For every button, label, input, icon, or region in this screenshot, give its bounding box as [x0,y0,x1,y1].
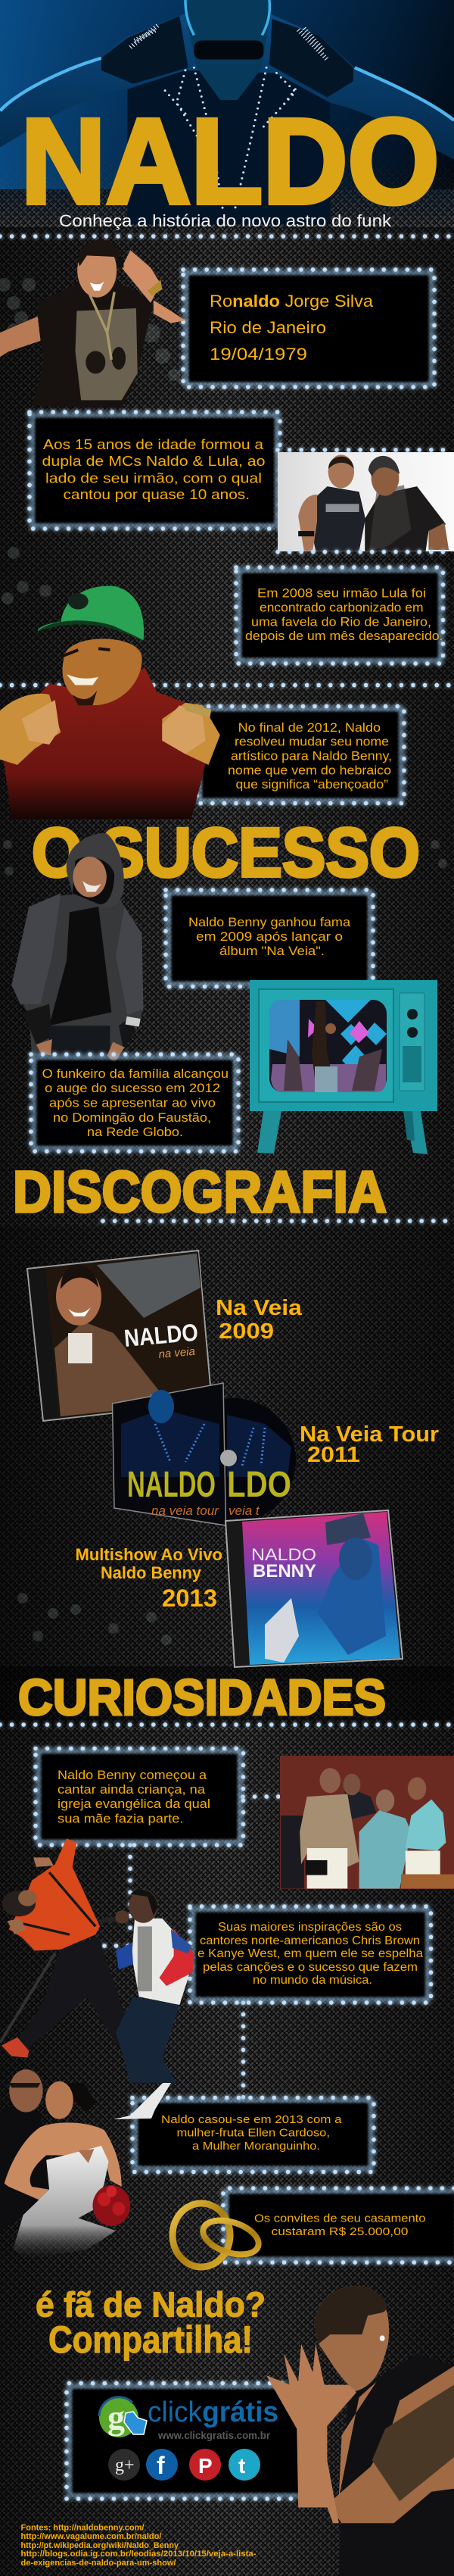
icon: Google Plus: g+ [115,2456,135,2475]
icon: Twitter: t [238,2454,245,2478]
header photo: blue-lit singer [0,0,454,235]
text block: Naldo Benny ganhou fama [188,916,351,929]
photo: wedding couple [0,2069,130,2259]
logo wordmark: clickgrátis [148,2396,278,2428]
panel: marriage [132,2098,374,2172]
sources [21,2523,257,2568]
panel: inspirations [190,1906,431,2003]
text block: e Kanye West, em quem ele se espelha [197,1947,423,1960]
photo: Naldo praying pose [266,2286,454,2576]
sources: http://www.vagalume.com.br/naldo/ [21,2532,162,2541]
panel: identity [183,270,434,387]
text block [42,1067,229,1139]
text block: No final de 2012, Naldo [238,721,381,735]
icon: gold wedding rings [173,2203,263,2267]
text block: a Mulher Moranguinho. [192,2140,320,2153]
text block: sua mãe fazia parte. [58,1812,184,1825]
icon: retro teal television [250,980,437,1154]
text block: mulher-fruta Ellen Cardoso, [177,2127,330,2140]
cover text: BENNY [253,1561,316,1582]
sources: http://blogs.odia.ig.com.br/leodias/2013/10/15/veja-a-lista- [21,2549,257,2559]
text block: encontrado carbonizado em [260,601,424,615]
panel: name change [197,706,404,803]
label: Na Veia 2009: 2009 [219,1319,274,1344]
heading: O SUCESSO: O SUCESSO [32,814,420,891]
photo: Naldo in green cap and red jacket [0,586,220,819]
text block: no Domingão do Faustão, [53,1111,211,1125]
disc cover title: NALDO [127,1465,216,1505]
identity text: 19/04/1979 [210,345,307,364]
photo: Naldo with family at church [280,1756,454,1889]
text block: cantar ainda criança, na [58,1783,206,1797]
text block: cantou por quase 10 anos. [64,486,250,502]
logo URL: www.clickgratis.com.br [157,2430,271,2441]
text block [188,916,351,958]
text block [58,1769,210,1825]
subtitle: Conheça a história do novo astro do funk [59,211,392,230]
disc subtitle: veia t [229,1503,260,1518]
text block: resolveu mudar seu nome [235,735,389,749]
text block: cantores norte-americanos Chris Brown [200,1934,420,1947]
text block: em 2009 após lançar o [196,930,343,944]
icon: Pinterest [189,2449,221,2481]
panel: invitations [223,2188,454,2262]
text block: álbum "Na Veia". [219,945,325,958]
label: Na Veia 2009 [216,1296,303,1344]
text block: o auge do sucesso em 2012 [45,1082,220,1095]
logo letter: g [107,2398,125,2437]
panel: fame in 2009 [166,890,373,986]
panel: church childhood [36,1748,244,1845]
text block: Naldo Benny começou a [58,1769,207,1782]
text block: pelas canções e o sucesso que fazem [203,1961,418,1974]
sources: Fontes: http://naldobenny.com/ [21,2523,145,2532]
text block: Aos 15 anos de idade formou a [43,436,264,452]
sources: http://pt.wikipedia.org/wiki/Naldo_Benny [21,2541,179,2550]
text block: Os convites de seu casamento [254,2212,425,2225]
TV screen: stage show [269,1000,387,1092]
label: Na Veia 2009: Na Veia [216,1296,303,1320]
icon: Twitter [229,2449,260,2481]
text block [245,587,443,643]
text block: nome que vem do hebraico [228,763,391,777]
text block: Suas maiores inspirações são os [218,1921,402,1934]
call to action: é fã de Naldo? Compartilha! [36,2284,266,2361]
label: Multishow 2013: Naldo Benny [101,1563,202,1582]
text block: Em 2008 seu irmão Lula foi [257,587,426,601]
call to action: é fã de Naldo? Compartilha!: Compartilha! [48,2318,253,2361]
text block: Naldo casou-se em 2013 com a [161,2113,342,2126]
identity text: Ronaldo Jorge Silva [210,292,374,311]
identity text [210,292,374,364]
text block: depois de um mês desaparecido. [245,629,443,643]
heading: CURIOSIDADES: CURIOSIDADES [18,1669,386,1726]
icon: Pinterest: P [198,2454,213,2478]
photo: Kanye West [98,1890,194,2083]
text block [228,721,392,792]
icon: hand cursor [124,2412,147,2434]
identity text: Rio de Janeiro [210,318,326,337]
text block [197,1921,423,1987]
text block: O funkeiro da família alcançou [42,1067,229,1081]
photo: Chris Brown [0,1838,127,2058]
text block: custaram R$ 25.000,00 [271,2225,409,2238]
album: Multishow Ao Vivo CD case [225,1510,403,1667]
label: Multishow 2013: 2013 [162,1585,217,1612]
label: Multishow 2013 [76,1545,222,1612]
label: Na Veia Tour 2011: Na Veia Tour [300,1422,439,1447]
album cover subtitle: na veia [158,1345,196,1361]
label: Na Veia Tour 2011: 2011 [307,1443,360,1467]
album: Na Veia Tour CD and disc [112,1383,296,1525]
album: Na Veia CD case [27,1251,212,1421]
photo: Naldo and Lula [278,450,454,552]
panel: clickgrátis share box [67,2383,325,2499]
text block: uma favela do Rio de Janeiro, [251,615,431,629]
text block: na Rede Globo. [87,1126,183,1139]
call to action: é fã de Naldo? Compartilha!: é fã de Naldo? [36,2284,266,2324]
panel: MCs Naldo & Lula [30,412,280,529]
text block: após se apresentar ao vivo [49,1097,216,1110]
cover subtitle: na veia tour [151,1503,219,1518]
icon: Facebook: f [157,2452,165,2479]
text block: igreja evangélica da qual [58,1797,210,1811]
text block: dupla de MCs Naldo & Lula, ao [42,453,265,469]
heading: DISCOGRAFIA: DISCOGRAFIA [13,1160,387,1225]
label: Multishow 2013: Multishow Ao Vivo [76,1545,222,1564]
text block: no mundo da música. [253,1974,372,1987]
text block: lado de seu irmão, com o qual [45,470,262,486]
text block [161,2113,342,2153]
text block [254,2212,425,2238]
disc label title: LDO [227,1465,291,1505]
logo: clickgrátis [99,2396,278,2441]
icon: Google Plus [108,2449,140,2481]
text block: que significa “abençoado” [236,778,388,792]
icon: white sneaker [114,2083,171,2119]
bokeh spots [0,278,447,1645]
photo: Naldo in hoodie [11,833,143,1063]
photo: Naldo laughing with headphones [0,240,185,408]
cover text: NALDO [251,1545,316,1564]
sources: de-exigencias-de-naldo-para-um-show/ [21,2559,176,2568]
icon: Facebook [146,2449,178,2481]
text block: artístico para Naldo Benny, [231,750,392,763]
album cover title: NALDO [123,1319,199,1352]
title: NALDO: NALDO [21,93,439,229]
label: Na Veia Tour 2011 [300,1422,439,1467]
panel: peak of success in 2012 [31,1054,238,1151]
text block [42,436,265,502]
panel: Lula found [236,567,443,664]
